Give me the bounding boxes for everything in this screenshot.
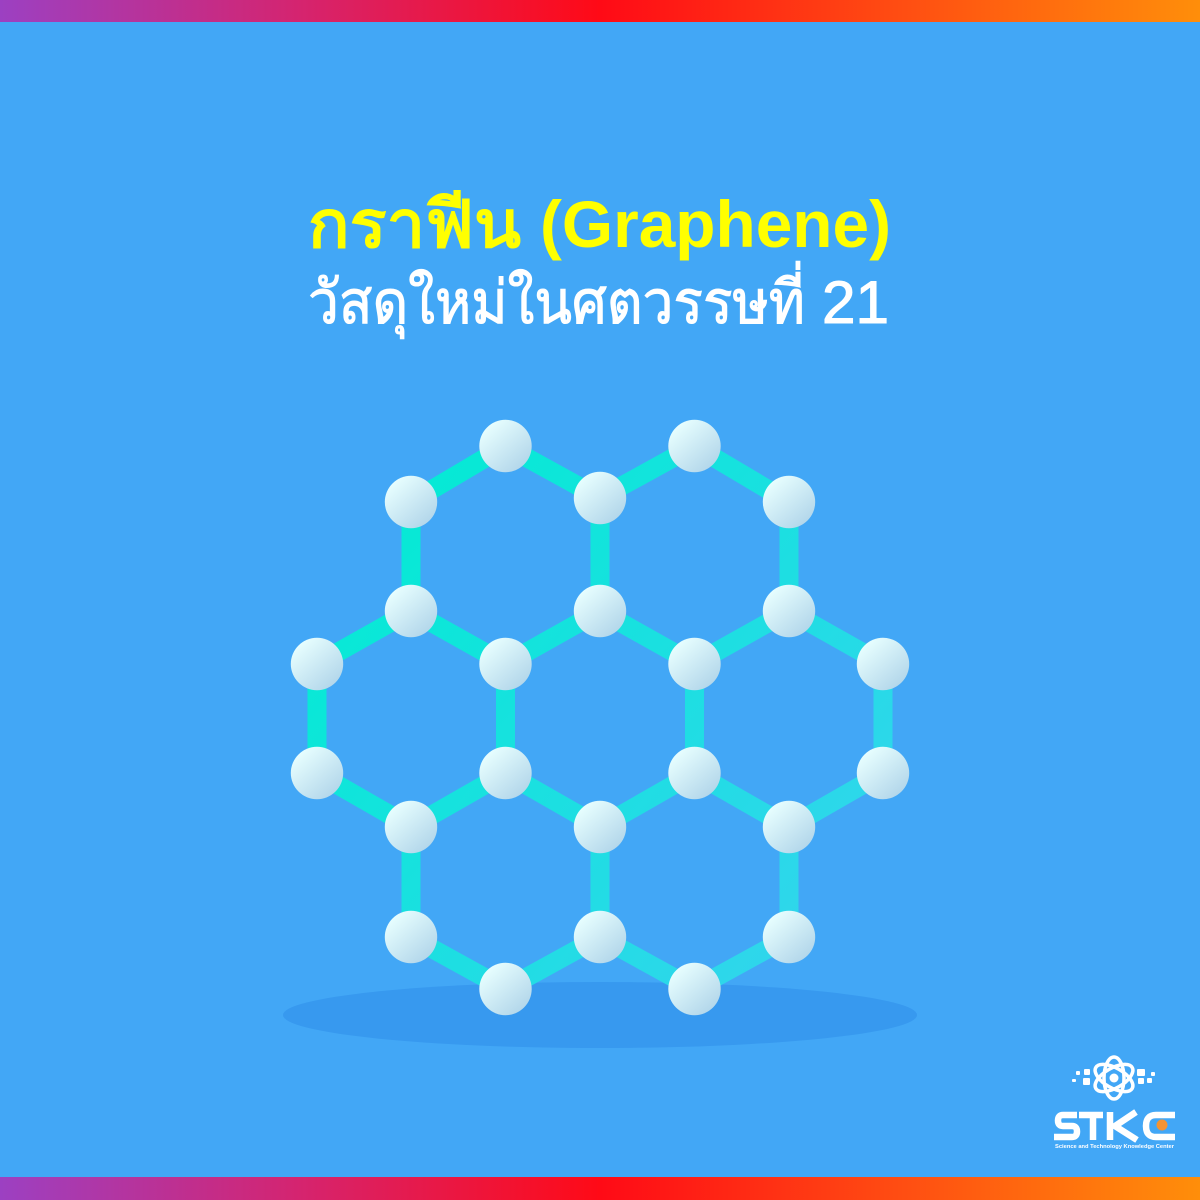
icon: atom emblem — [1072, 1057, 1155, 1099]
ground shadow — [283, 982, 917, 1048]
title line 1: graphene: (Graphene) — [540, 187, 891, 261]
title line 2: subtitle: 21 — [822, 269, 889, 336]
title line 1: graphene — [308, 187, 891, 261]
atoms — [291, 420, 909, 1015]
top gradient bar — [0, 0, 1200, 22]
logo wordmark — [1054, 1112, 1175, 1140]
logo tagline: Science and Technology Knowledge Center — [1055, 1144, 1175, 1150]
logo orange dot — [1156, 1120, 1168, 1130]
bottom gradient bar — [0, 1177, 1200, 1200]
bonds — [317, 446, 883, 989]
title — [308, 187, 891, 339]
title line 1: graphene: กราฟีน — [308, 187, 521, 261]
graphene molecule — [291, 420, 909, 1015]
STKC logo — [1054, 1057, 1175, 1150]
title line 2: subtitle: วัสดุใหม่ในศตวรรษที่ — [308, 261, 805, 339]
